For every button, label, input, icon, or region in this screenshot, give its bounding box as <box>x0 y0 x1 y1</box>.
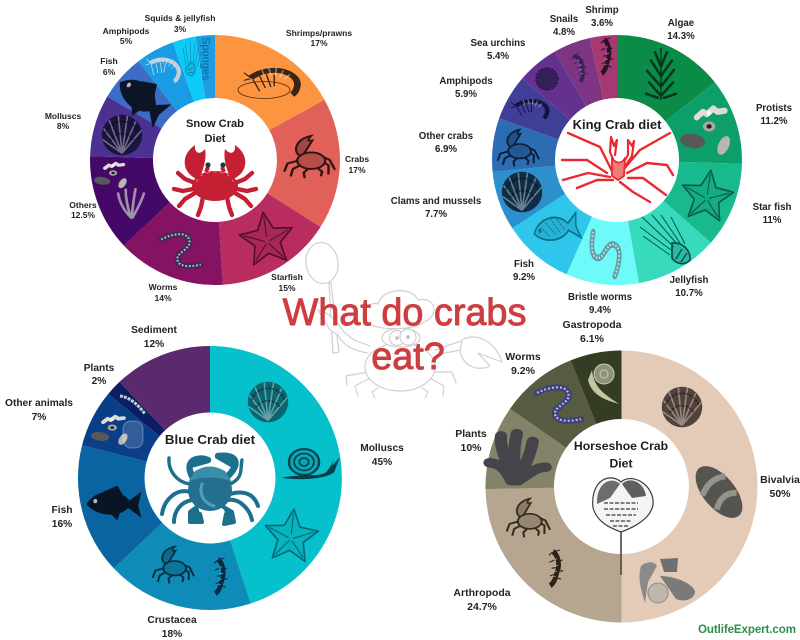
icon: starfish <box>237 209 297 266</box>
label: squids & jellyfish: Squids & jellyfish <box>145 13 215 23</box>
label: molluscs: 45% <box>372 457 392 468</box>
label: other crabs: 6.9% <box>435 144 457 155</box>
icon: amphipod <box>511 99 547 118</box>
label: worms: 14% <box>154 293 172 303</box>
icon: protists <box>90 417 129 446</box>
icon: starfish <box>679 167 736 222</box>
label: sea urchins: 5.4% <box>487 51 509 62</box>
donut: king crab <box>492 35 742 285</box>
label: arthropoda: Arthropoda <box>453 587 511 599</box>
slice: plants <box>108 382 165 436</box>
icon: crab <box>284 136 335 178</box>
icon: snail <box>282 449 340 479</box>
label: amphipods: 5% <box>120 36 133 46</box>
icon: shrimp <box>601 38 613 74</box>
label: shrimp: Shrimp <box>585 5 619 16</box>
label: crustacea: 18% <box>162 629 182 640</box>
label: sediment: Sediment <box>131 325 178 336</box>
panel: snow crab diet <box>45 13 369 303</box>
illustration: red snow crab <box>174 145 256 215</box>
slice: sponges <box>196 35 215 99</box>
slice: algae <box>617 35 715 121</box>
label: starfish: Starfish <box>271 272 303 282</box>
icon: bristle worm <box>592 232 619 276</box>
slice: amphipods <box>138 42 194 111</box>
slice: arthropoda <box>486 488 622 622</box>
label: star fish: Star fish <box>753 202 791 213</box>
icon: coral plant <box>490 434 546 481</box>
icon: jellyfish <box>640 215 690 264</box>
label: amphipods: Amphipods <box>103 26 150 36</box>
slice: plants <box>485 409 566 489</box>
donut: blue crab <box>78 346 342 610</box>
label: clams and mussels: 7.7% <box>425 209 447 220</box>
slice: fish <box>107 61 177 128</box>
label: fish: Fish <box>100 56 118 66</box>
slice: gastropoda <box>571 350 622 424</box>
donut: horseshoe crab <box>485 350 758 622</box>
slice: snails <box>555 38 604 106</box>
slice: molluscs <box>210 346 342 604</box>
icon: shrimp <box>549 550 563 586</box>
centre: snow crab title: Diet <box>205 133 226 145</box>
slice: fish <box>512 194 592 274</box>
title: What do crabs <box>283 292 526 334</box>
icon: sea shells <box>640 558 695 603</box>
label: other crabs: Other crabs <box>419 131 473 142</box>
illustration: blue crab <box>162 456 258 524</box>
label: sponges: Sponges <box>200 37 212 81</box>
label: crustacea: Crustacea <box>147 615 197 626</box>
icon: jellyfish <box>171 38 210 77</box>
icon: amphipod <box>144 54 181 82</box>
label: squids & jellyfish: 3% <box>174 24 187 34</box>
icon: protists <box>679 108 733 157</box>
label: fish: Fish <box>52 505 72 516</box>
slice: worms <box>124 202 223 285</box>
label: crabs: Crabs <box>345 154 369 164</box>
label: gastropoda: Gastropoda <box>563 319 622 331</box>
label: sea urchins: Sea urchins <box>471 38 525 49</box>
title: eat? <box>371 336 445 378</box>
panel: horseshoe crab diet <box>453 319 800 622</box>
slice: molluscs <box>90 96 162 158</box>
centre: snow crab title: Snow Crab <box>186 118 244 130</box>
illustration: chef crab outline <box>303 240 502 398</box>
icon: starfish <box>262 506 320 562</box>
icon: mussel <box>687 458 751 526</box>
label: worms: Worms <box>505 351 541 363</box>
centre: king crab title: King Crab diet <box>573 117 662 132</box>
icon: mollusc shell <box>102 115 142 155</box>
slice: bivalvia <box>622 350 758 622</box>
label: fish: Fish <box>514 259 534 270</box>
centre: horseshoe crab title: Horseshoe Crab <box>574 439 668 453</box>
label: jellyfish: 10.7% <box>675 288 703 299</box>
slice: clams and mussels <box>493 166 565 228</box>
slice: amphipods <box>499 78 570 139</box>
label: algae: Algae <box>668 18 695 29</box>
label: shrimps/prawns: Shrimps/prawns <box>286 28 352 38</box>
label: bivalvia: 50% <box>769 488 791 500</box>
icon: crab <box>153 547 194 583</box>
icon: snail <box>588 364 619 404</box>
label: molluscs: Molluscs <box>360 443 404 454</box>
label: fish: 9.2% <box>513 272 535 283</box>
label: bivalvia: Bivalvia <box>760 474 800 486</box>
centre: horseshoe crab title: Diet <box>609 456 633 470</box>
icon: fish <box>532 212 581 247</box>
icon: shrimp <box>238 68 297 98</box>
icon: shell <box>248 382 288 422</box>
label: plants: Plants <box>455 428 487 440</box>
icon: worm <box>537 387 581 421</box>
icon: snail <box>570 51 591 82</box>
label: amphipods: Amphipods <box>439 76 493 87</box>
label: protists: Protists <box>756 103 792 114</box>
label: gastropoda: 6.1% <box>580 333 605 345</box>
illustration: red king crab <box>562 133 673 202</box>
slice: other crabs <box>492 118 558 172</box>
label: others: Others <box>69 200 97 210</box>
label: algae: 14.3% <box>667 31 695 42</box>
label: worms: Worms <box>149 282 178 292</box>
panel: king crab diet <box>391 5 792 316</box>
icon: fish <box>86 486 142 520</box>
label: shrimp: 3.6% <box>591 18 613 29</box>
slice: shrimps/prawns <box>215 35 324 130</box>
label: snails: Snails <box>550 14 578 25</box>
slice: crustacea <box>114 523 251 610</box>
slice: jellyfish <box>628 201 711 283</box>
slice: others <box>90 156 170 246</box>
icon: algae <box>646 48 676 100</box>
icon: shrimp <box>214 558 228 594</box>
slice: shrimp <box>590 35 617 100</box>
donut: snow crab <box>90 35 340 285</box>
icon: plant <box>118 189 144 218</box>
centre: blue crab title: Blue Crab diet <box>165 432 256 447</box>
label: starfish: 15% <box>278 283 296 293</box>
label: bristle worms: 9.4% <box>589 305 611 316</box>
icon: worm <box>161 234 201 266</box>
icon: shell <box>662 387 702 427</box>
slice: worms <box>510 360 596 448</box>
label: amphipods: 5.9% <box>455 89 477 100</box>
icon: fish <box>108 65 176 131</box>
slice: squids and jellyfish <box>173 36 205 102</box>
label: plants: Plants <box>84 363 115 374</box>
label: plants: 10% <box>460 442 482 454</box>
panel: blue crab diet <box>5 325 404 640</box>
icon: jelly <box>123 421 143 448</box>
label: plants: 2% <box>92 376 106 387</box>
label: snails: 4.8% <box>553 27 575 38</box>
label: star fish: 11% <box>763 215 782 226</box>
label: other animals: 7% <box>32 412 46 423</box>
slice: sediment <box>120 346 210 430</box>
credit: website: OutlifeExpert.com <box>698 623 796 636</box>
label: clams and mussels: Clams and mussels <box>391 196 481 207</box>
slice: star fish <box>664 162 742 243</box>
slice: fish <box>78 445 162 568</box>
label: fish: 16% <box>52 519 72 530</box>
illustration: horseshoe crab <box>593 478 653 575</box>
slice: sea urchins <box>522 52 586 120</box>
slice: starfish <box>219 193 320 285</box>
label: shrimps/prawns: 17% <box>310 38 328 48</box>
label: molluscs: 8% <box>57 121 70 131</box>
label: arthropoda: 24.7% <box>467 601 498 613</box>
label: sediment: 12% <box>144 339 164 350</box>
label: crabs: 17% <box>348 165 366 175</box>
icon: plant <box>120 396 145 414</box>
label: worms: 9.2% <box>511 365 536 377</box>
icon: crab <box>507 499 550 537</box>
icon: other crab <box>498 130 539 166</box>
slice: crabs <box>267 100 340 227</box>
label: others: 12.5% <box>71 210 95 220</box>
icon: sea urchin <box>536 68 558 90</box>
slice: protists <box>666 82 742 164</box>
icon: protists <box>93 163 128 189</box>
label: bristle worms: Bristle worms <box>568 292 632 303</box>
label: other animals: Other animals <box>5 398 73 409</box>
slice: other animals <box>82 394 160 462</box>
label: molluscs: Molluscs <box>45 111 81 121</box>
label: protists: 11.2% <box>761 116 788 127</box>
label: jellyfish: Jellyfish <box>670 275 708 286</box>
slice: bristle worms <box>567 217 639 285</box>
label: fish: 6% <box>103 67 116 77</box>
icon: clam shell <box>502 172 542 212</box>
